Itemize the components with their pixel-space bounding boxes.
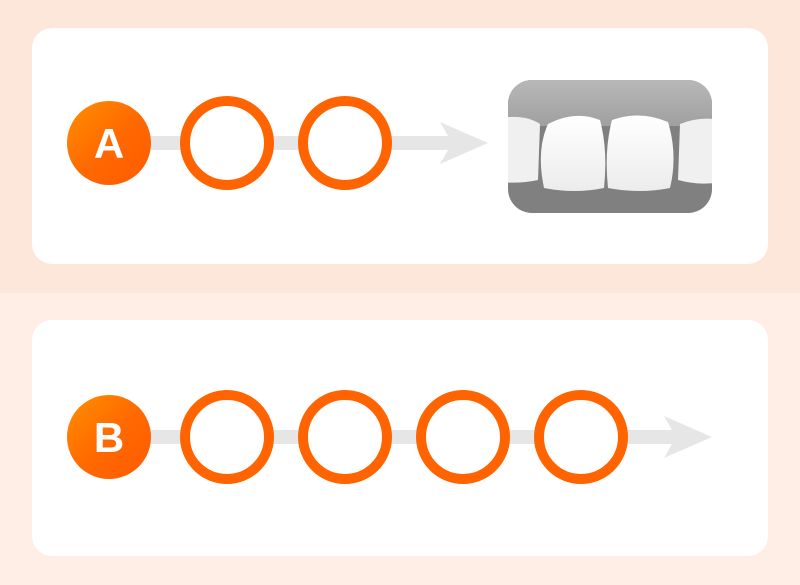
badge A [67,101,151,185]
arrow A [140,122,488,164]
badge A: A [94,120,124,167]
badge B: B [94,414,124,461]
step circles A [185,101,387,185]
image: teeth [500,80,720,213]
arrow B [140,416,712,458]
panel: A [32,28,768,264]
panel: B [32,320,768,556]
step circles B [185,395,623,479]
badge B [67,395,151,479]
